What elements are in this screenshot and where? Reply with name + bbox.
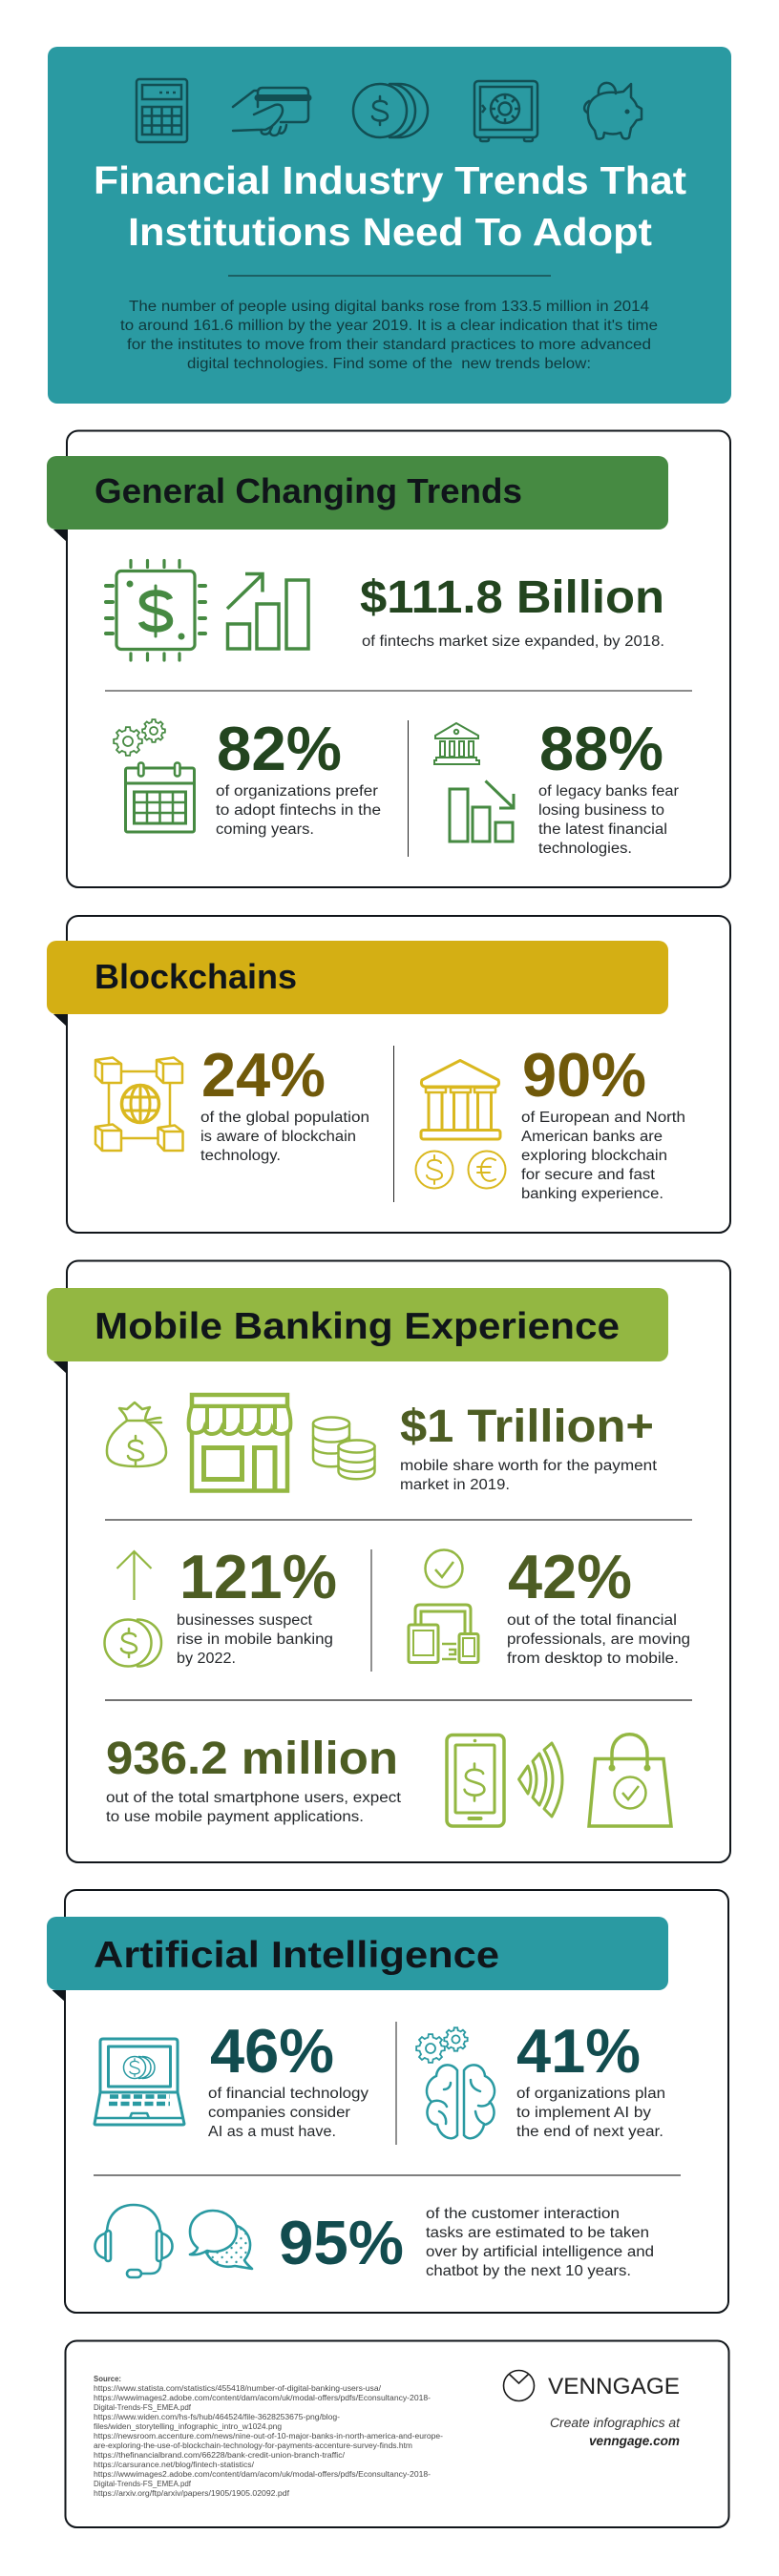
icon: growth bars (227, 574, 308, 649)
icon: coins (353, 84, 428, 137)
call to action: venngage.com (589, 2434, 680, 2448)
stat: 46%: companies consider (208, 2105, 350, 2121)
icon: laptop (95, 2039, 184, 2125)
stat: 46%: 46% (210, 2016, 334, 2086)
icon: dollar chip (106, 561, 205, 660)
stat: 90%: American banks are (521, 1129, 663, 1145)
stat: 121%: 121% (179, 1542, 337, 1611)
icon: check circle (426, 1549, 462, 1588)
intro text: The number of people using digital banks rose from 133.5 million in 2014 (129, 299, 649, 315)
stat: 41%: of organizations plan (516, 2086, 665, 2102)
source list: https://wwwimages2.adobe.com/content/dam/acom/uk/modal-offers/pdfs/Econsultancy-2018- (94, 2470, 431, 2479)
stat: 936.2 million: 936.2 million (106, 1734, 398, 1784)
stat: 88%: 88% (539, 714, 663, 783)
icon: piggy bank (584, 83, 642, 139)
stat: 24%: of the global population (200, 1110, 369, 1126)
icon: bank with columns (421, 1061, 500, 1139)
intro text: for the institutes to move from their standard practices to more advanced (127, 337, 651, 353)
icon: small bank (434, 723, 479, 764)
source list: https://www.widen.com/hs-fs/hub/464524/file-3628253675-png/blog- (94, 2413, 340, 2421)
heading banner (47, 456, 668, 530)
stat: one trillion: mobile share worth for the payment (400, 1458, 658, 1474)
stat: 42%: from desktop to mobile. (507, 1651, 679, 1667)
icon: chat bubbles (190, 2211, 252, 2269)
stat: 82%: coming years. (216, 821, 314, 838)
stat: 42%: out of the total financial (507, 1612, 677, 1629)
title (94, 158, 686, 254)
stat: 121% (177, 1542, 337, 1667)
stat: one trillion: $1 Trillion+ (400, 1402, 654, 1452)
stat: 90%: exploring blockchain (521, 1148, 667, 1164)
stat: 24%: 24% (201, 1040, 326, 1110)
stat: 82%: of organizations prefer (216, 783, 378, 800)
stat: 42% (507, 1542, 690, 1667)
heading banner: Artificial Intelligence (94, 1935, 499, 1976)
stat: 88%: losing business to (538, 802, 664, 819)
title: Institutions Need To Adopt (128, 210, 652, 254)
stat: 121%: by 2022. (177, 1651, 236, 1667)
intro text (120, 299, 658, 372)
stat: 41% (516, 2016, 665, 2140)
heading banner: Mobile Banking Experience (95, 1306, 620, 1347)
stat: 90%: for secure and fast (521, 1167, 656, 1183)
intro text: to around 161.6 million by the year 2019. It is a clear indication that it's time (120, 318, 658, 334)
panel: artificial intelligence (47, 1890, 728, 2313)
source list: https://carsurance.net/blog/fintech-statistics/ (94, 2461, 255, 2469)
icon: headset (95, 2205, 172, 2277)
heading banner: General Changing Trends (95, 471, 522, 510)
source list: Digital-Trends-FS_EMEA.pdf (94, 2480, 192, 2488)
icon: blockchain globe (95, 1057, 183, 1151)
stat: 88% (538, 714, 679, 857)
source list: Source: (94, 2375, 121, 2383)
stat: 936.2 million: to use mobile payment applications. (106, 1809, 364, 1825)
stat: 42%: 42% (508, 1542, 632, 1611)
stat: 82%: to adopt fintechs in the (216, 802, 381, 819)
stat: 41%: 41% (516, 2016, 641, 2086)
intro text: digital technologies. Find some of the new trends below: (187, 356, 591, 372)
stat: 121%: businesses suspect (177, 1612, 313, 1629)
stat: one trillion (400, 1402, 658, 1493)
stat: 46%: of financial technology (208, 2086, 368, 2102)
icon: hand holding card (233, 88, 308, 135)
stat: 121%: rise in mobile banking (177, 1631, 333, 1648)
heading banner (47, 1288, 668, 1361)
icon: gears (114, 719, 165, 756)
icon: calendar (126, 763, 195, 832)
icon: money bag (107, 1402, 166, 1466)
source list: https://arxiv.org/ftp/arxiv/papers/1905/1905.02092.pdf (94, 2489, 290, 2498)
stat: 88%: the latest financial (538, 821, 667, 838)
stat: 90%: banking experience. (521, 1186, 663, 1202)
source list: https://wwwimages2.adobe.com/content/dam/acom/uk/modal-offers/pdfs/Econsultancy-2018- (94, 2394, 431, 2402)
stat: 82%: 82% (217, 714, 342, 783)
panel: mobile banking experience (47, 1261, 730, 1862)
icon: brain (427, 2065, 495, 2138)
heading banner: Blockchains (95, 957, 297, 996)
stat: 90%: 90% (522, 1040, 646, 1110)
icon: calculator (137, 79, 187, 142)
stat: 24%: is aware of blockchain (200, 1129, 356, 1145)
icon: dollar coin (105, 1620, 161, 1666)
icon: shop front (189, 1395, 290, 1490)
stat: 90%: of European and North (521, 1110, 685, 1126)
stat: 936.2 million: out of the total smartphone users, expect (106, 1790, 402, 1806)
stat: 42%: professionals, are moving (507, 1631, 690, 1648)
icon: dollar and euro coins (416, 1151, 506, 1189)
stat: 88%: technologies. (538, 841, 632, 857)
source list: https://thefinancialbrand.com/66228/bank-credit-union-branch-traffic/ (94, 2451, 346, 2460)
icon: up arrow (116, 1551, 151, 1600)
icon: falling bars (450, 780, 514, 841)
logo: venngage: VENNGAGE (548, 2374, 680, 2399)
stat: 46% (208, 2016, 368, 2140)
stat: 95%: chatbot by the next 10 years. (426, 2263, 631, 2279)
stat: 95%: of the customer interaction (426, 2206, 620, 2222)
icon: devices (409, 1605, 478, 1662)
stat: 88%: of legacy banks fear (538, 783, 679, 800)
source list: files/widen_storytelling_infographic_intro_w1024.png (94, 2422, 282, 2431)
stat: 41%: the end of next year. (516, 2124, 663, 2140)
stat: 95% (279, 2206, 654, 2279)
stat: 24%: technology. (200, 1148, 281, 1164)
call to action: Create infographics at (550, 2416, 681, 2430)
source list: https://newsroom.accenture.com/news/nine-out-of-10-major-banks-in-north-america-and-europe- (94, 2432, 443, 2441)
source list: https://www.statista.com/statistics/455418/number-of-digital-banking-users-usa/ (94, 2384, 382, 2393)
stat: market size: $111.8 Billion (360, 572, 664, 623)
heading banner (47, 1917, 668, 1990)
icon: contactless waves (519, 1743, 562, 1817)
stat: 82% (216, 714, 381, 838)
stat: 936.2 million (106, 1734, 402, 1825)
heading banner (47, 941, 668, 1014)
source list (94, 2375, 443, 2498)
icon: shopping bag (589, 1735, 671, 1826)
icon: smartphone payment (447, 1735, 504, 1826)
icon: gears (416, 2027, 468, 2063)
panel: blockchains (47, 916, 730, 1233)
stat: 90% (521, 1040, 685, 1202)
stat: 95%: over by artificial intelligence and (426, 2244, 654, 2260)
stat: market size: of fintechs market size expanded, by 2018. (362, 634, 664, 650)
stat: 24% (200, 1040, 369, 1164)
source list: are-exploring-the-use-of-blockchain-technology-for-payments-accenture-survey-finds.htm (94, 2441, 412, 2450)
stat: 95%: 95% (279, 2208, 404, 2277)
logo: venngage (504, 2370, 680, 2400)
stat: 46%: AI as a must have. (208, 2124, 336, 2140)
icon: coin stacks (313, 1418, 374, 1479)
stat: one trillion: market in 2019. (400, 1477, 510, 1493)
source list: Digital-Trends-FS_EMEA.pdf (94, 2403, 192, 2412)
title: Financial Industry Trends That (94, 158, 686, 202)
call to action (550, 2416, 681, 2448)
stat: market size (360, 572, 664, 650)
header panel (48, 47, 731, 404)
stat: 41%: to implement AI by (516, 2105, 651, 2121)
panel: general changing trends (47, 431, 730, 887)
stat: 95%: tasks are estimated to be taken (426, 2225, 649, 2241)
icon: safe (474, 81, 537, 141)
panel: footer (65, 2341, 729, 2527)
